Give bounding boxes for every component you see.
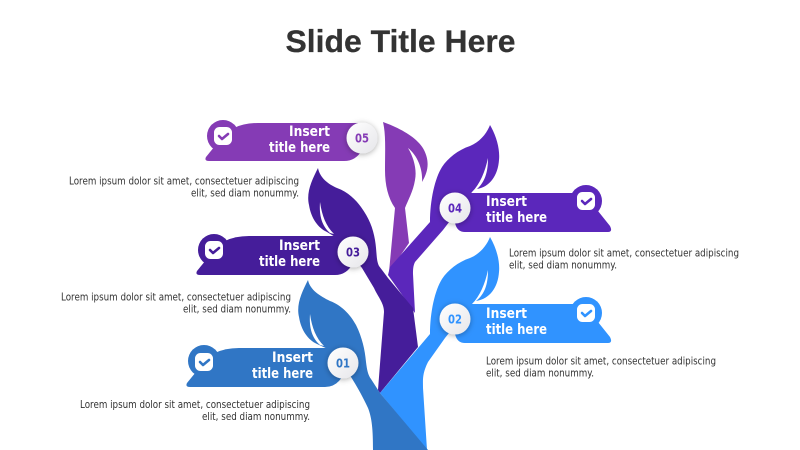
bar title 02: title here xyxy=(486,322,547,338)
text block 04: Lorem ipsum dolor sit amet, consectetuer adipiscing xyxy=(509,246,739,260)
bar title 05: title here xyxy=(269,140,330,156)
banner 01 xyxy=(186,345,358,387)
bar title 04 xyxy=(486,194,547,226)
title: Slide Title Here xyxy=(286,23,516,59)
number 01: 01 xyxy=(336,356,350,370)
text block 01: Lorem ipsum dolor sit amet, consectetuer adipiscing xyxy=(80,398,310,411)
banner 02 xyxy=(440,297,611,343)
text block 05 xyxy=(69,174,299,200)
number 03 xyxy=(338,236,368,268)
bar 01 xyxy=(186,345,343,387)
number 01 xyxy=(328,348,358,378)
banner 03 xyxy=(196,234,368,275)
number 02 xyxy=(440,304,470,334)
icon: check 04 xyxy=(577,192,595,210)
white crescent 01 xyxy=(310,314,324,346)
bar 04 xyxy=(455,185,611,232)
text block 02: elit, sed diam nonummy. xyxy=(486,366,594,380)
text block 03: elit, sed diam nonummy. xyxy=(183,302,291,316)
bar 02 xyxy=(455,297,611,343)
bar title 02: Insert xyxy=(486,306,527,322)
bar 05 xyxy=(205,120,362,161)
text block 01 xyxy=(80,398,310,423)
bar title 01 xyxy=(252,350,313,382)
icon: check 03 xyxy=(205,241,223,259)
bar title 04: title here xyxy=(486,210,547,226)
bar title 03 xyxy=(259,238,320,270)
number 04 xyxy=(440,192,470,224)
text block 05: elit, sed diam nonummy. xyxy=(191,186,299,200)
text block 03: Lorem ipsum dolor sit amet, consectetuer adipiscing xyxy=(61,290,291,304)
banner 04 xyxy=(440,185,611,232)
bar title 05: Insert xyxy=(289,124,330,140)
bar title 05 xyxy=(269,124,330,156)
leaf and branch 03 xyxy=(308,168,418,393)
leaf and stem 01 xyxy=(298,280,428,450)
text block 02 xyxy=(486,354,716,380)
white crescent 03 xyxy=(320,202,334,234)
number 04: 04 xyxy=(448,202,462,216)
bar 03 xyxy=(196,234,353,275)
text block 03 xyxy=(61,290,291,316)
bar title 01: Insert xyxy=(272,350,313,366)
icon: check 01 xyxy=(195,353,213,371)
plant illustration xyxy=(298,122,499,450)
number 02: 02 xyxy=(448,312,462,326)
text block 05: Lorem ipsum dolor sit amet, consectetuer adipiscing xyxy=(69,174,299,188)
bar title 03: Insert xyxy=(279,238,320,254)
bar title 04: Insert xyxy=(486,194,527,210)
icon: check 05 xyxy=(214,127,232,145)
number 05: 05 xyxy=(355,132,369,146)
text block 04 xyxy=(509,246,739,272)
number 03: 03 xyxy=(346,246,360,260)
leaf and branch 04 xyxy=(388,125,499,313)
bar title 01: title here xyxy=(252,366,313,382)
banner 05 xyxy=(205,120,378,161)
text block 01: elit, sed diam nonummy. xyxy=(202,410,310,423)
bar title 03: title here xyxy=(259,254,320,270)
bar title 02 xyxy=(486,306,547,338)
leaf and branch 02 xyxy=(380,237,499,450)
number 05 xyxy=(346,122,378,154)
text block 04: elit, sed diam nonummy. xyxy=(509,258,617,272)
text block 02: Lorem ipsum dolor sit amet, consectetuer adipiscing xyxy=(486,354,716,368)
leaf and stem 05 xyxy=(383,122,428,272)
icon: check 02 xyxy=(577,304,595,322)
